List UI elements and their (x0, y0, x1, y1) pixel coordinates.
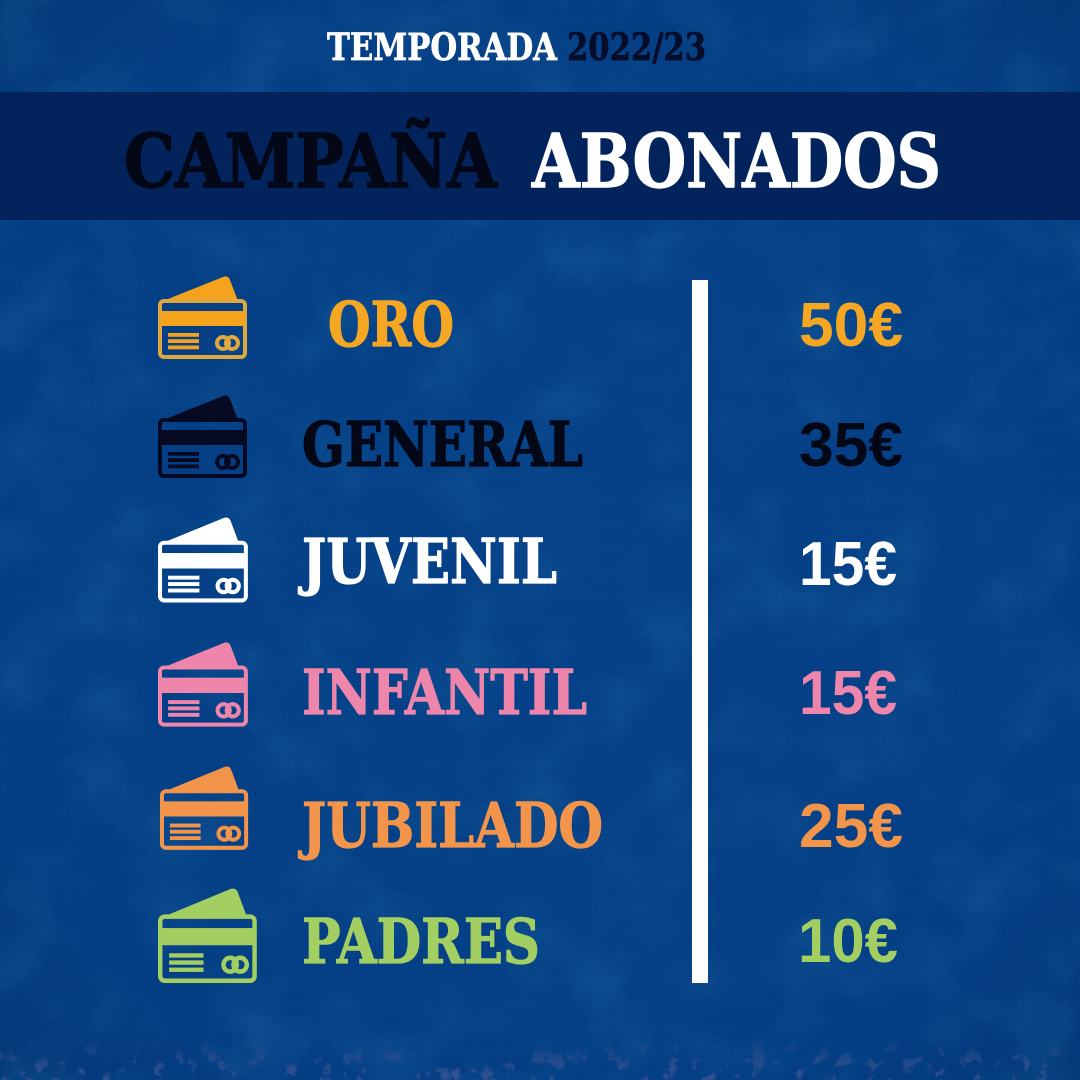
label: oro: ORO (328, 288, 454, 361)
divider bar (692, 280, 708, 983)
title: CAMPAÑA (124, 117, 498, 205)
price: general: 35€ (799, 411, 903, 480)
icon: card juvenil (160, 517, 246, 600)
price: oro: 50€ (799, 291, 903, 360)
price: juvenil: 15€ (799, 530, 897, 599)
label: padres: PADRES (302, 905, 540, 978)
title band (0, 92, 1080, 220)
icon: card padres (160, 888, 255, 981)
icon: card infantil (160, 642, 246, 725)
subtitle: TEMPORADA (327, 25, 558, 69)
label: general: GENERAL (302, 408, 583, 481)
icon: card jubilado (162, 766, 246, 848)
price: jubilado: 25€ (799, 792, 903, 861)
price: infantil: 15€ (799, 659, 897, 728)
icon: card oro (160, 276, 245, 357)
label: infantil: INFANTIL (302, 656, 587, 729)
label: juvenil: JUVENIL (298, 525, 557, 598)
title: ABONADOS (531, 119, 941, 205)
label: jubilado: JUBILADO (298, 789, 603, 862)
subtitle: 2022/23 (567, 25, 706, 69)
icon: card general (160, 395, 245, 476)
title (124, 117, 941, 205)
price: padres: 10€ (798, 907, 898, 976)
